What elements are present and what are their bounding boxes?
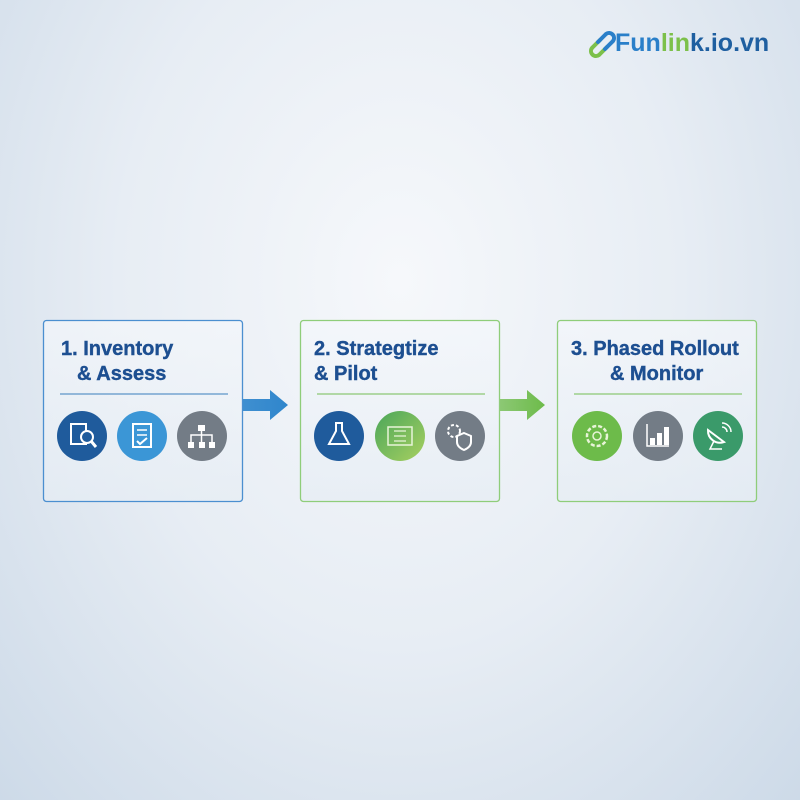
panel: 1 Inventory & Assess [44, 320, 242, 502]
icon: chain link [591, 33, 614, 56]
heading 2: & Pilot [314, 363, 378, 385]
panel: 3 Phased Rollout & Monitor [558, 320, 756, 502]
icon: gear cycle [572, 411, 622, 461]
heading 3: 3. Phased Rollout [571, 338, 739, 360]
icon: document search [57, 411, 107, 461]
icon: bar chart [633, 411, 683, 461]
icon: blueprint [375, 411, 425, 461]
heading 2: 2. Strategtize [314, 338, 438, 360]
icon: clipboard [117, 411, 167, 461]
panel: 2 Strategtize & Pilot [300, 320, 500, 502]
icon: satellite dish [693, 411, 743, 461]
icon: hierarchy [177, 411, 227, 461]
heading 1: 1. Inventory [61, 338, 174, 360]
heading 3: & Monitor [610, 363, 704, 385]
heading 1: & Assess [77, 363, 166, 385]
logo: Funlink.io.vn [615, 29, 769, 57]
icon: flask [314, 411, 364, 461]
arrow 2 [500, 390, 545, 420]
icon: gear shield [435, 411, 485, 461]
arrow 1 [243, 390, 288, 420]
